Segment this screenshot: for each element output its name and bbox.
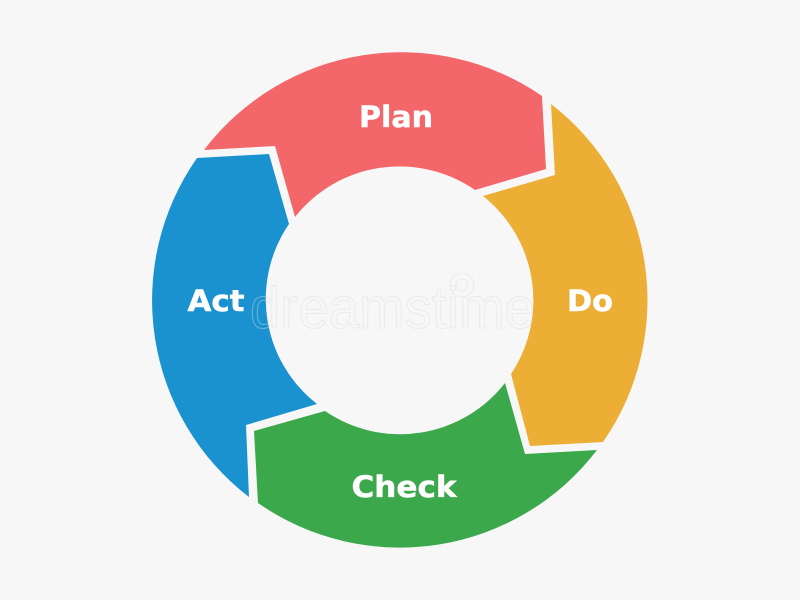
label: Check: Check	[352, 470, 457, 504]
segment: Check	[254, 383, 597, 548]
label: Act: Act	[188, 284, 245, 318]
segment: Do	[483, 104, 647, 446]
label: Plan: Plan	[359, 100, 433, 134]
segment: Act	[152, 154, 317, 497]
label: Do: Do	[567, 284, 613, 318]
segment: Plan	[204, 52, 546, 217]
watermark: dreamstime	[250, 276, 535, 341]
